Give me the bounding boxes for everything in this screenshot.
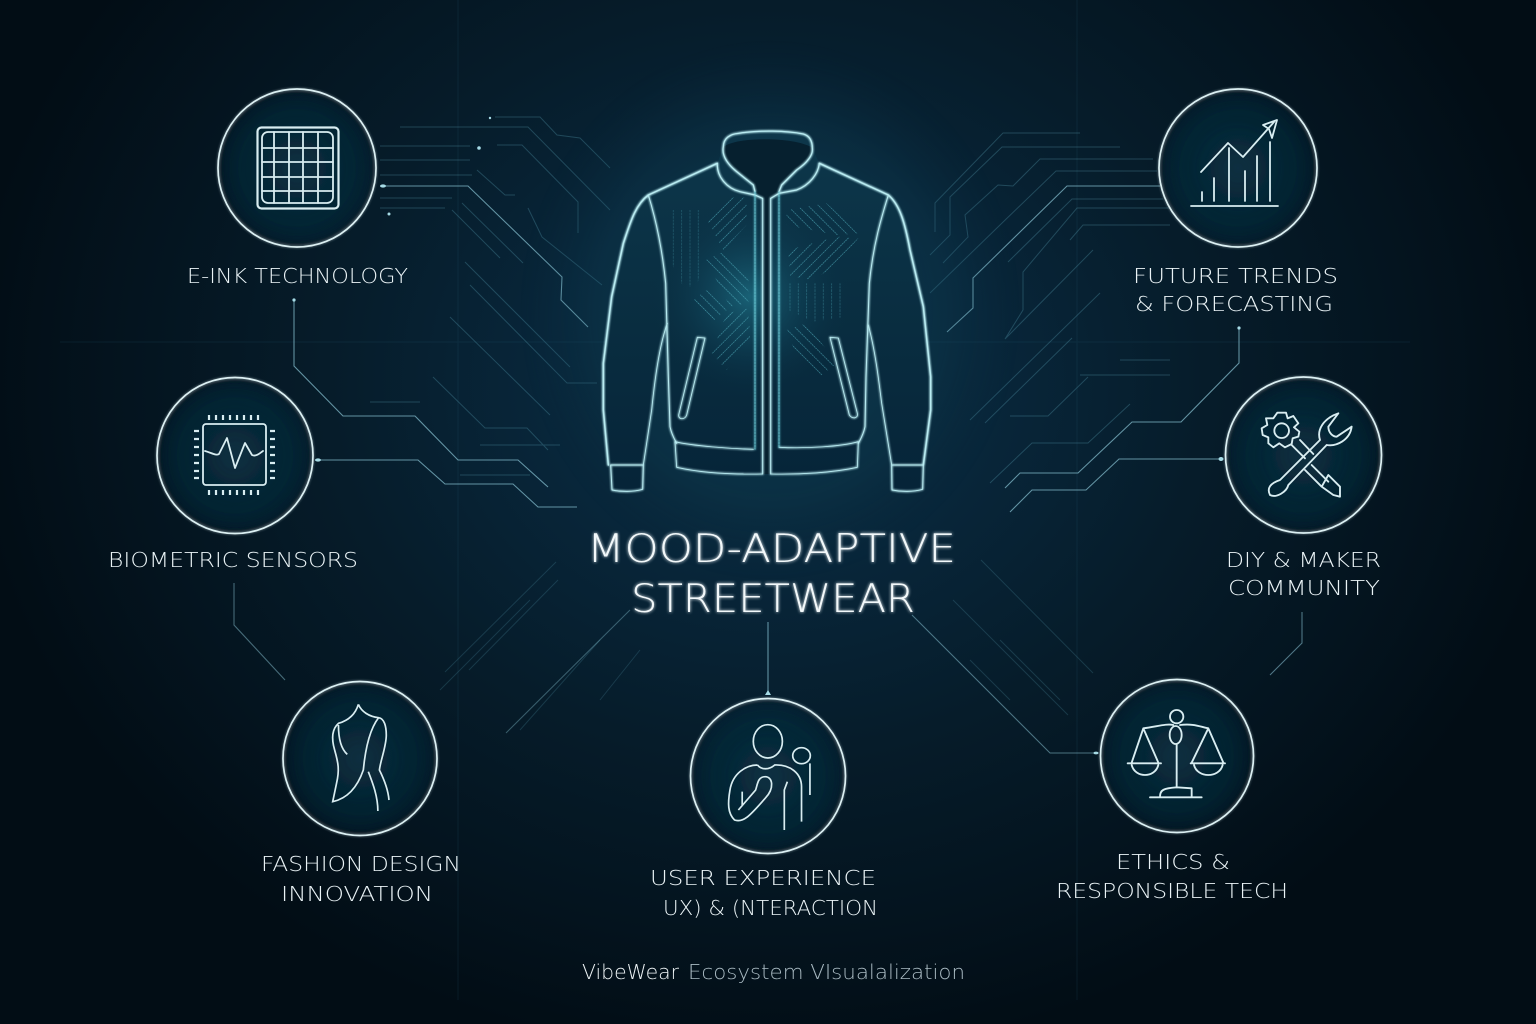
connector traces	[234, 186, 1302, 753]
label	[650, 866, 878, 920]
label: ETHICS &	[1116, 850, 1230, 874]
trace: diy	[1010, 459, 1222, 512]
icon: dress form	[333, 704, 389, 811]
panel: diy and maker	[1226, 377, 1382, 600]
jacket halo	[520, 40, 1020, 580]
icon: rising chart	[1191, 120, 1278, 206]
title	[587, 527, 956, 622]
icon: gear and tools	[1262, 413, 1352, 497]
trace: e-ink side	[383, 186, 588, 327]
icon: user figure	[729, 725, 810, 830]
chest glow	[647, 197, 867, 397]
panel: ethics	[1056, 680, 1288, 903]
trace: future trends	[1005, 328, 1239, 488]
trace: fashion to title	[506, 610, 630, 733]
right cuff	[892, 465, 923, 491]
circuit network: right	[930, 133, 1170, 715]
label: & FORECASTING	[1135, 292, 1333, 316]
armholes and side seams	[648, 195, 888, 443]
collar band	[717, 163, 819, 198]
hem	[675, 442, 858, 474]
panel: biometric sensors	[108, 378, 358, 572]
label: COMMUNITY	[1228, 576, 1381, 600]
label	[1226, 548, 1381, 600]
label: E-INK TECHNOLOGY	[187, 264, 409, 288]
label: BIOMETRIC SENSORS	[108, 548, 358, 572]
trace: diy to ethics	[1270, 612, 1302, 675]
panel: future trends	[1133, 89, 1338, 316]
neck interior	[723, 139, 812, 474]
title: MOOD-ADAPTIVE	[587, 527, 956, 572]
footer caption: VibeWear	[582, 960, 680, 984]
label: DIY & MAKER	[1226, 548, 1381, 572]
trace: e-ink to jacket	[294, 300, 548, 487]
trace: future side	[947, 186, 1160, 332]
circuit network: left	[370, 117, 640, 730]
label	[1133, 264, 1338, 316]
icon: sensor chip	[194, 415, 275, 495]
chest circuit pattern	[670, 197, 860, 377]
shoulders and outer sleeves	[603, 163, 931, 465]
panel: user experience	[650, 698, 878, 920]
icon: e-ink grid	[258, 128, 338, 208]
panel: fashion design	[261, 682, 461, 906]
label: INNOVATION	[281, 882, 433, 906]
label: UX) & (NTERACTION	[663, 896, 878, 920]
label	[1056, 850, 1288, 903]
panel: e-ink technology	[187, 89, 409, 288]
trace: biometric	[316, 460, 577, 507]
label: FASHION DESIGN	[261, 852, 461, 876]
title: STREETWEAR	[631, 577, 915, 622]
jacket outline	[603, 131, 931, 491]
label: USER EXPERIENCE	[650, 866, 876, 890]
footer caption	[582, 960, 965, 984]
label	[261, 852, 461, 906]
trace: ethics	[912, 615, 1096, 753]
left cuff	[611, 465, 643, 491]
label: RESPONSIBLE TECH	[1056, 879, 1288, 903]
pockets	[679, 337, 858, 419]
inner sleeves	[643, 323, 892, 465]
trace: ux	[767, 622, 769, 695]
label: FUTURE TRENDS	[1133, 264, 1338, 288]
collar	[723, 131, 812, 192]
trace: biometric to fashion	[234, 583, 285, 680]
zipper placket	[763, 198, 771, 474]
icon: balance scales	[1128, 710, 1225, 797]
jacket illustration	[603, 131, 931, 491]
connector nodes	[292, 117, 1241, 754]
footer caption: Ecosystem VIsualalization	[688, 960, 965, 984]
jacket body silhouette	[603, 131, 931, 491]
